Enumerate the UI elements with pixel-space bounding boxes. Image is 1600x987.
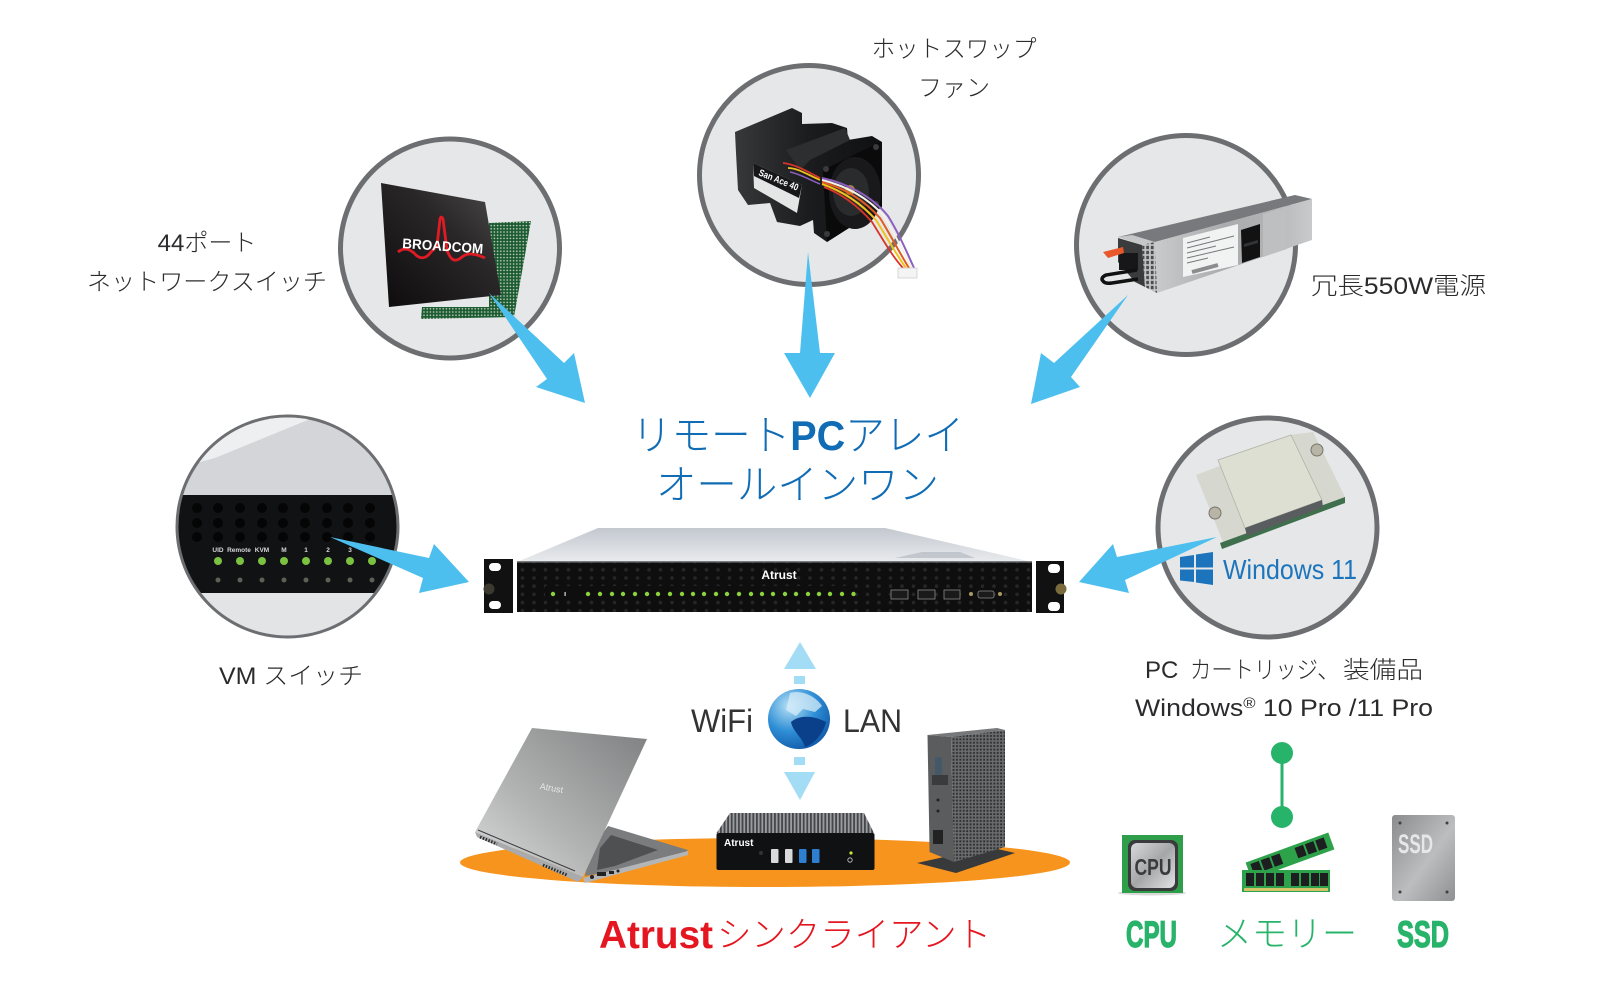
icon: mini thin client — [716, 813, 874, 870]
circle: network switch — [340, 139, 560, 358]
VM switch closeup: M — [281, 547, 287, 554]
icon: laptop — [475, 728, 688, 883]
label: 44 port network switch: ネットワークスイッチ — [87, 269, 327, 296]
circle: VM switch base — [178, 417, 397, 636]
icon: tower thin client — [917, 728, 1015, 873]
label: PC cartridge: 10 Pro /11 Pro — [1256, 695, 1433, 722]
icon: laptop: Atrust — [539, 781, 564, 795]
title: オールインワン — [656, 462, 939, 508]
icon: memory — [1242, 832, 1334, 892]
label: LAN: LAN — [843, 703, 902, 739]
label: PC cartridge: PC — [1145, 657, 1178, 684]
icon: CPU — [1118, 835, 1186, 896]
panel: 44-port network switch — [340, 139, 560, 358]
label: Atrust thin client — [599, 914, 991, 957]
label: VM switch: VM スイッチ — [219, 663, 363, 690]
arrow: up — [784, 642, 816, 669]
icon: globe — [768, 689, 830, 749]
circle: power supply — [1076, 136, 1296, 354]
rack ears — [484, 559, 1066, 613]
label: 44 port network switch — [87, 230, 327, 296]
label: PC cartridge — [1135, 657, 1433, 722]
title — [632, 412, 964, 508]
icon: mini thin client: Atrust — [724, 838, 754, 849]
server top cover — [517, 528, 1032, 562]
VM switch closeup: KVM — [255, 547, 269, 554]
panel: hot swap fan — [700, 66, 918, 284]
icon: BGA substrate — [421, 221, 531, 319]
label: redundant 550W power: 冗長550W電源 — [1311, 273, 1486, 300]
label: PC cartridge: 、 — [1317, 657, 1341, 684]
icon: Broadcom chip: BROADCOM — [402, 235, 484, 257]
network: WiFi LAN globe — [691, 642, 902, 800]
circle: fan — [700, 66, 918, 284]
connector: green line — [1271, 742, 1293, 828]
arrow: VM switch to server — [330, 537, 469, 593]
label: SSD: SSD — [1397, 914, 1449, 955]
icon: power supply unit — [1102, 195, 1312, 293]
VM switch closeup: 3 — [348, 547, 352, 554]
server front panel — [517, 562, 1032, 612]
orange platform — [460, 838, 1070, 887]
VM switch closeup: 2 — [326, 547, 330, 554]
label: PC cartridge: カートリッジ — [1190, 657, 1318, 684]
server ports — [891, 590, 994, 599]
label: Atrust thin client: シンクライアント — [717, 916, 991, 955]
label: memory: メモリー — [1217, 913, 1357, 954]
server logo: Atrust — [761, 568, 797, 582]
VM switch closeup — [178, 418, 396, 636]
thin clients — [460, 728, 1070, 887]
arrow: power to centre — [1031, 295, 1128, 404]
icon: Windows logo — [1180, 552, 1213, 585]
label: PC cartridge: ® — [1243, 695, 1256, 712]
arrow: fan to centre — [784, 252, 835, 398]
title: リモートPCアレイ — [632, 412, 964, 459]
label: PC cartridge: 装備品 — [1343, 657, 1423, 684]
panel: PC cartridge — [1158, 418, 1377, 637]
VM switch closeup: 1 — [304, 547, 308, 554]
label: hot swap fan: ホットスワップ — [872, 36, 1036, 63]
icon: CPU: CPU — [1134, 854, 1172, 880]
icon: SSD — [1392, 815, 1455, 901]
label: PC cartridge: Windows — [1135, 695, 1232, 722]
VM switch closeup: Remote — [227, 547, 251, 554]
icon: Broadcom chip — [381, 183, 501, 307]
arrow: network switch to centre — [489, 293, 585, 403]
label: hot swap fan — [872, 36, 1036, 102]
arrow: cartridge to server — [1079, 537, 1217, 593]
label: WiFi: WiFi — [691, 703, 753, 739]
panel: redundant power supply — [1076, 136, 1312, 354]
label: Atrust thin client: Atrust — [599, 914, 713, 957]
panel: VM switch — [170, 415, 410, 643]
icon: fan — [735, 108, 917, 278]
arrow: down — [794, 757, 805, 765]
Windows 11 wordmark: Windows 11 — [1223, 554, 1357, 585]
VM switch closeup: UID — [212, 547, 224, 554]
label: CPU: CPU — [1126, 914, 1177, 955]
server LEDs — [551, 592, 856, 596]
icon: SSD: SSD — [1398, 829, 1433, 859]
icon: PC cartridge board — [1196, 432, 1345, 549]
server: remote PC array — [484, 528, 1066, 613]
label: 44 port network switch: 44ポート — [158, 230, 256, 257]
circle: PC cartridge — [1158, 418, 1377, 637]
label: hot swap fan: ファン — [918, 75, 990, 102]
icon: fan: San Ace 40 — [757, 168, 800, 194]
